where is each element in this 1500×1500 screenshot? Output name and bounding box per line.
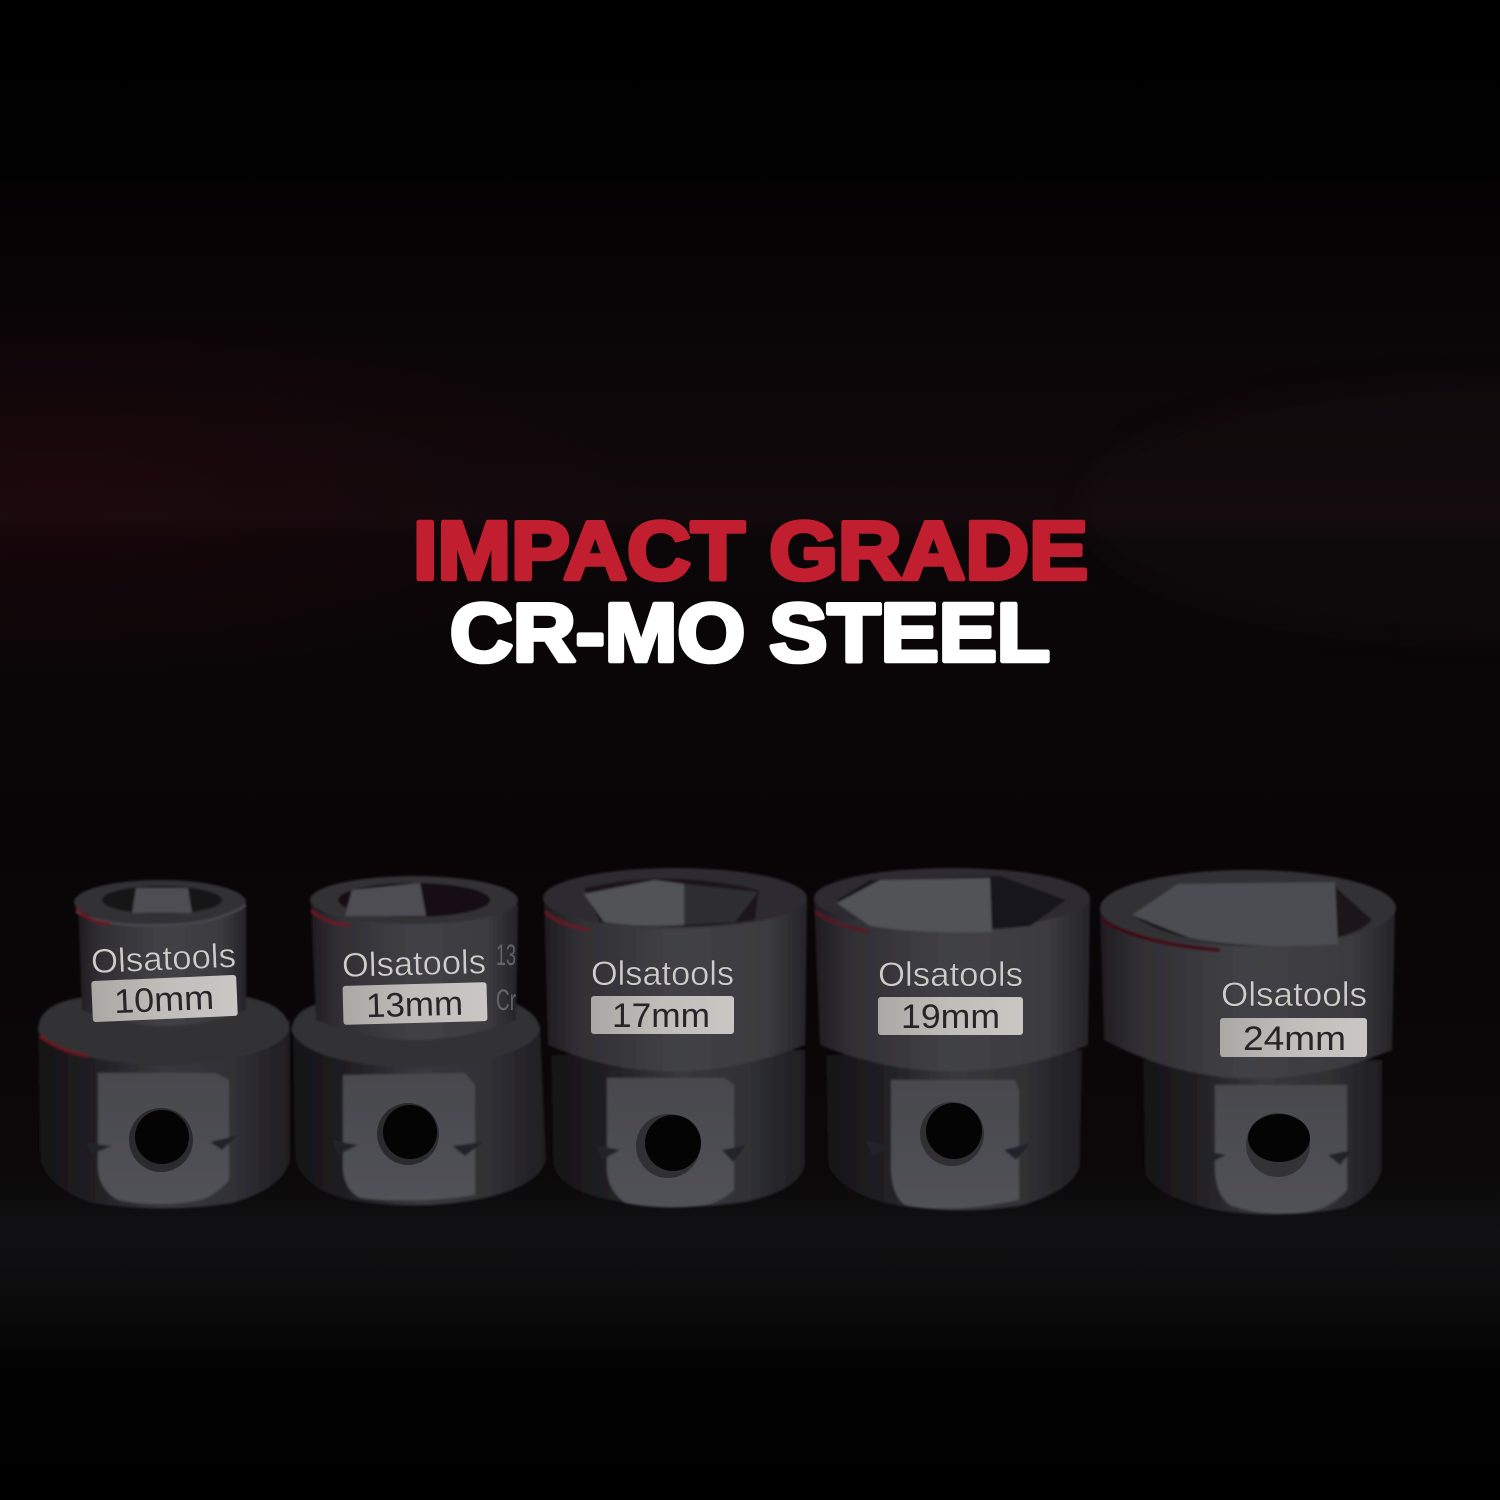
socket body 13mm xyxy=(291,876,546,1206)
size plate 19mm xyxy=(878,997,1023,1036)
size plate 24mm: 24mm xyxy=(1243,1020,1346,1058)
size plate 10mm: 10mm xyxy=(113,979,215,1021)
size plate 19mm: 19mm xyxy=(901,998,1000,1036)
drive hole 24mm xyxy=(1246,1113,1310,1177)
socket: 19mm xyxy=(814,868,1090,1210)
side marking 13mm: 13 xyxy=(496,939,516,972)
socket body 24mm xyxy=(1100,870,1396,1215)
brand mark 24mm: Olsatools xyxy=(1221,976,1367,1014)
socket body 17mm xyxy=(543,868,807,1207)
side marking 13mm: Cr xyxy=(496,984,516,1017)
drive hole 19mm xyxy=(920,1102,984,1166)
side marking 13mm xyxy=(496,939,516,1017)
socket: 10mm xyxy=(38,880,290,1208)
title line: cr-mo steel: CR-MO STEEL xyxy=(450,586,1050,679)
size plate 13mm xyxy=(343,982,488,1026)
size plate 17mm: 17mm xyxy=(612,997,710,1035)
socket: 17mm xyxy=(543,868,807,1207)
brand mark 10mm: Olsatools xyxy=(90,937,237,981)
socket: 13mm xyxy=(291,876,546,1206)
size plate 17mm xyxy=(591,996,734,1035)
size plate 13mm: 13mm xyxy=(366,985,464,1025)
drive hole 10mm xyxy=(129,1108,193,1172)
title xyxy=(413,504,1088,679)
brand mark 13mm: Olsatools xyxy=(342,943,486,985)
socket body 19mm xyxy=(814,868,1090,1210)
drive hole 13mm xyxy=(377,1103,439,1165)
socket body 10mm xyxy=(38,880,290,1208)
drive hole 17mm xyxy=(636,1114,701,1178)
title line: impact grade: IMPACT GRADE xyxy=(413,504,1088,597)
size plate 24mm xyxy=(1220,1018,1367,1058)
socket: 24mm xyxy=(1100,870,1396,1215)
brand mark 19mm: Olsatools xyxy=(878,956,1023,994)
brand mark 17mm: Olsatools xyxy=(591,955,734,993)
size plate 10mm xyxy=(91,975,238,1022)
